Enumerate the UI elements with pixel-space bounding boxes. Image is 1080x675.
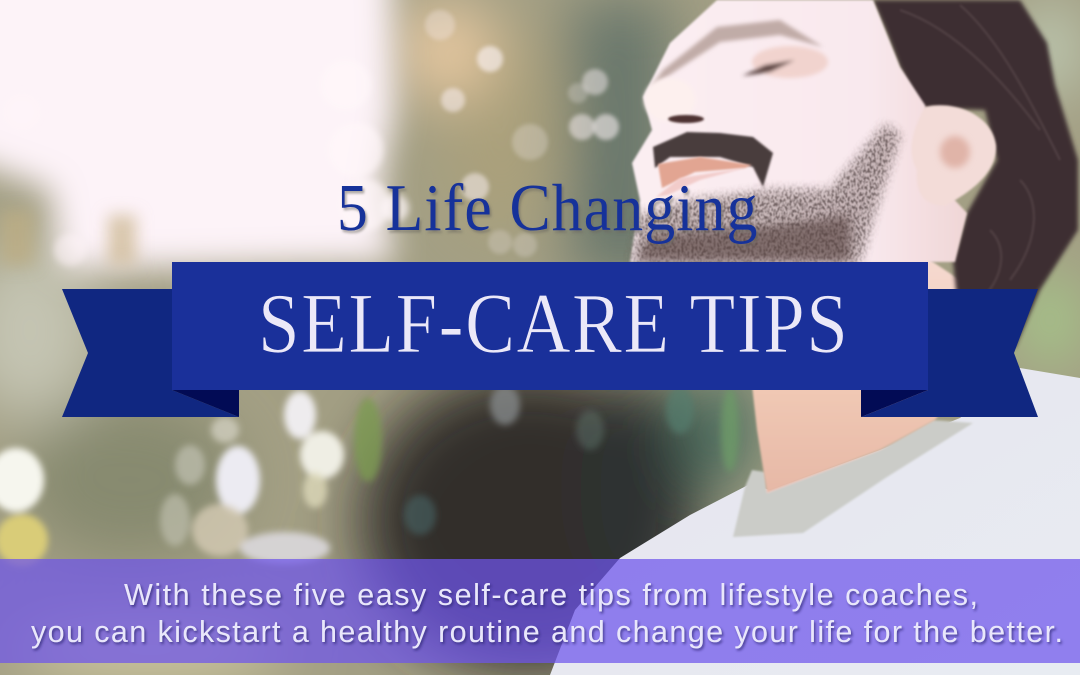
photo: man's t-shirt: [550, 368, 1080, 675]
ribbon left fold: [172, 390, 239, 417]
photo: man's hair: [873, 0, 1078, 348]
bokeh below the ribbon: [0, 385, 739, 566]
ribbon left tail: [62, 289, 239, 417]
photo: moustache: [653, 132, 773, 187]
photo: hair strands: [900, 5, 1060, 295]
tan tree trunks at the left: [0, 210, 136, 265]
photo: eyebrow and eye: [650, 20, 828, 88]
caption line 1: With these five easy self-care tips from lifestyle coaches,: [124, 578, 978, 612]
ribbon right fold: [861, 390, 928, 417]
purple caption strip: [0, 559, 1080, 663]
photo: man's neck: [752, 240, 965, 493]
photo: man's face: [630, 0, 967, 262]
photo: beard: [632, 125, 900, 262]
ribbon right tail: [861, 289, 1038, 417]
sunlight glare: [0, 0, 395, 270]
ribbon main band: [172, 262, 928, 390]
photo: nostril: [668, 115, 704, 123]
photo: ear: [912, 105, 996, 206]
heading: self-care tips: SELF-CARE TIPS: [258, 276, 848, 371]
ribbon banner: [62, 262, 1038, 417]
photo: lips: [658, 157, 752, 188]
heading: 5 Life Changing: 5 Life Changing: [337, 171, 757, 245]
photo: nose shading: [644, 78, 696, 122]
caption line 2: you can kickstart a healthy routine and change your life for the better.: [31, 615, 1063, 649]
photo: t-shirt collar: [733, 420, 973, 537]
